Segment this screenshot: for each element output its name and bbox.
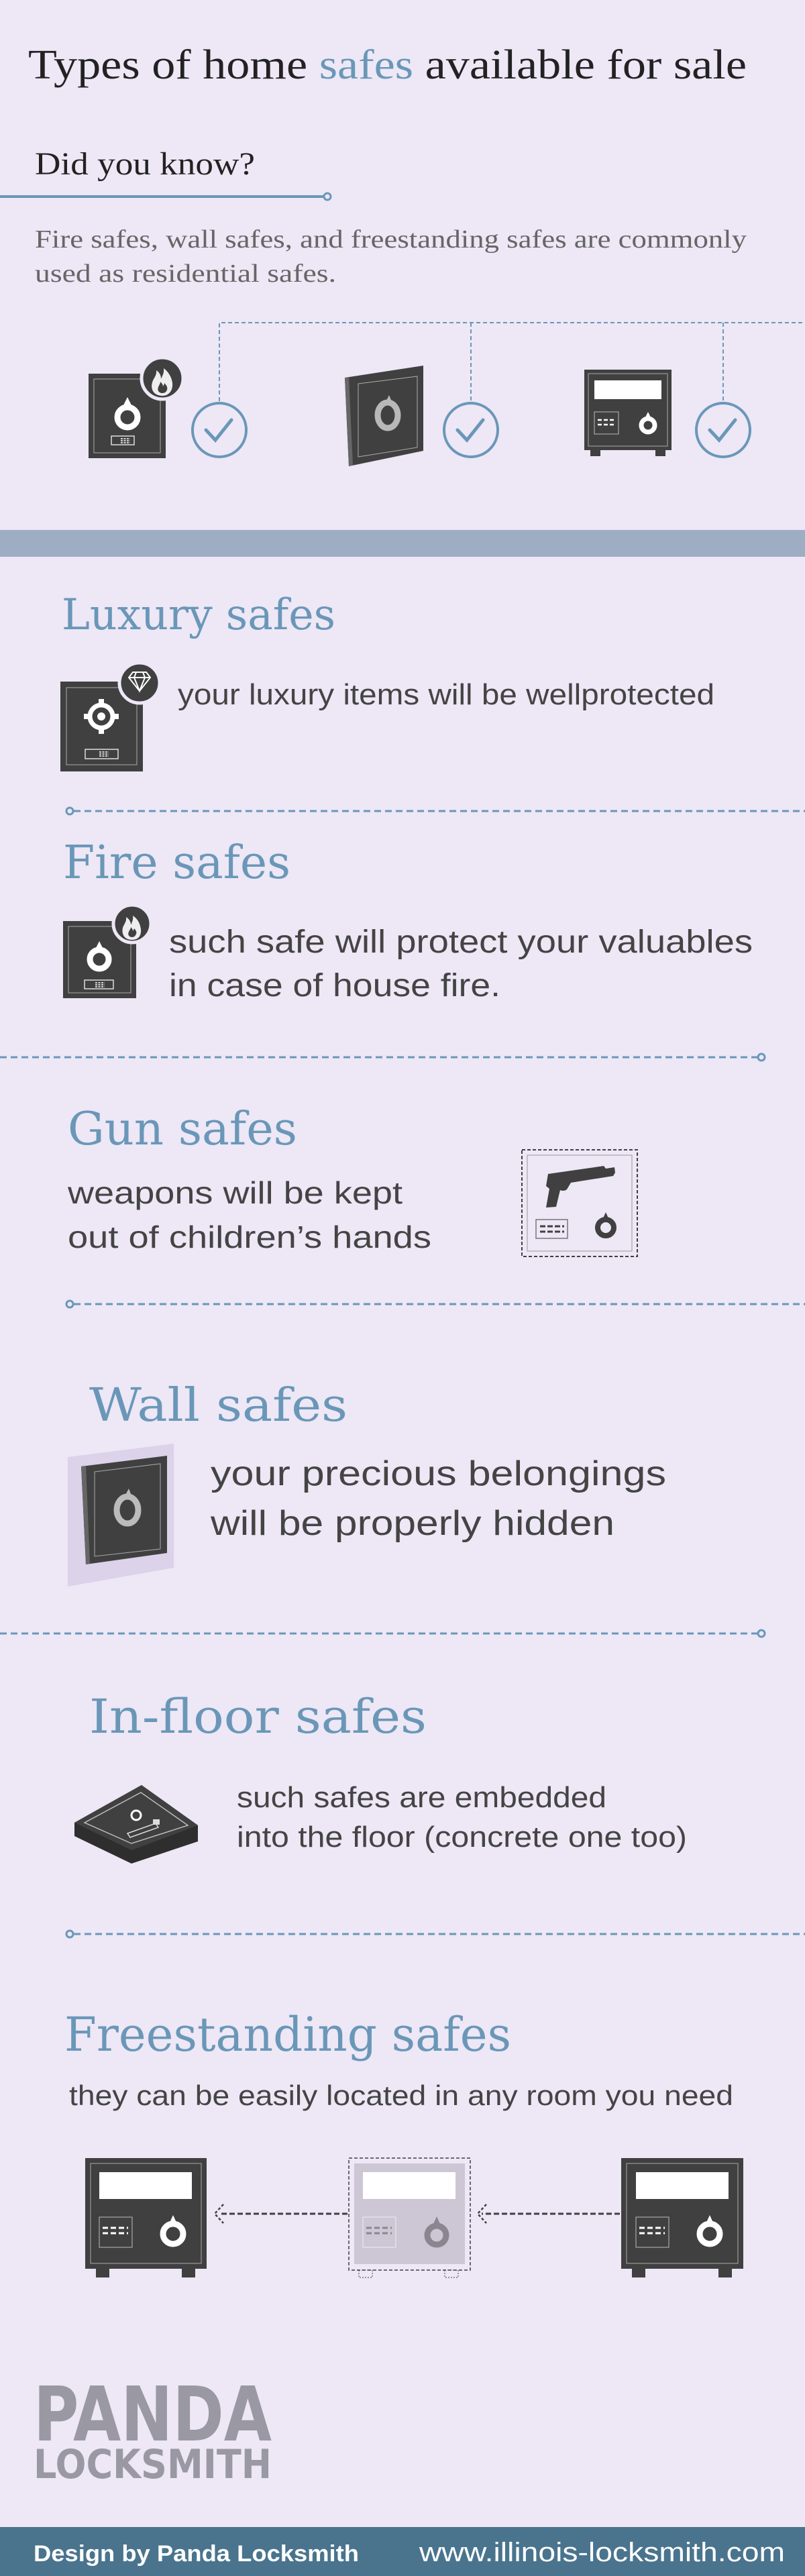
icon: wall safe [345, 366, 423, 466]
intro text: Fire safes, wall safes, and freestanding safes are commonly [35, 225, 747, 254]
icon: in-floor safe [74, 1785, 198, 1864]
section: luxury safes: your luxury items will be wellprotected [178, 678, 714, 711]
section: freestanding safes [64, 2007, 743, 2277]
dotted divider 5 [66, 1931, 805, 1937]
section: in-floor safes: into the floor (concrete one too) [237, 1821, 687, 1854]
icon: luxury safe [60, 663, 160, 771]
intro text: used as residential safes. [35, 260, 336, 288]
section: fire safes: Fire safes [63, 837, 290, 890]
divider band [0, 530, 805, 557]
section: wall safes: Wall safes [89, 1379, 347, 1432]
arrow right [478, 2204, 620, 2223]
section: in-floor safes: such safes are embedded [237, 1781, 606, 1814]
section: fire safes: such safe will protect your valuables [169, 924, 753, 960]
subheading: did you know: Did you know? [35, 146, 255, 182]
footer [0, 2527, 805, 2576]
connector lines [219, 323, 805, 401]
subheading: did you know [0, 146, 331, 200]
icon: freestanding safe right [621, 2158, 743, 2277]
section: fire safes: in case of house fire. [169, 968, 500, 1004]
section: in-floor safes [74, 1689, 687, 1864]
section: gun safes: Gun safes [68, 1103, 297, 1156]
logo: panda locksmith: LOCKSMITH [34, 2441, 272, 2488]
section: fire safes [63, 837, 753, 1004]
dotted divider 3 [66, 1301, 805, 1307]
icon: fire safe [63, 905, 151, 998]
icon: freestanding safe left [85, 2158, 207, 2277]
section: freestanding safes: Freestanding safes [64, 2007, 511, 2062]
icon: fire safe [89, 358, 183, 458]
section: gun safes [67, 1103, 637, 1256]
section: freestanding safes: they can be easily located in any room you need [69, 2080, 733, 2111]
section: wall safes [68, 1379, 666, 1587]
icon: freestanding safe [584, 370, 672, 456]
title: Types of home safes available for sale [28, 42, 747, 88]
section: luxury safes: Luxury safes [62, 590, 335, 640]
check circle 3 [696, 403, 750, 457]
section: luxury safes [60, 590, 714, 771]
arrow left [215, 2204, 347, 2223]
logo: panda locksmith: PANDA [34, 2371, 272, 2459]
intro text [35, 225, 747, 288]
check circle 1 [193, 403, 246, 457]
section: wall safes: your precious belongings [211, 1454, 666, 1493]
dotted divider 1 [66, 808, 805, 814]
dotted divider 4 [0, 1630, 765, 1637]
icon: freestanding safe ghost [349, 2158, 470, 2277]
section: in-floor safes: In-floor safes [89, 1689, 427, 1744]
section: gun safes: weapons will be kept [67, 1175, 402, 1210]
logo: panda locksmith [34, 2371, 272, 2488]
section: wall safes: will be properly hidden [210, 1504, 614, 1543]
footer: Design by Panda Locksmith [34, 2541, 359, 2567]
section: gun safes: out of children’s hands [68, 1220, 431, 1254]
dotted divider 2 [0, 1054, 765, 1061]
icon: gun safe [522, 1150, 637, 1256]
footer: www.illinois-locksmith.com [419, 2538, 785, 2567]
icon: wall safe [68, 1444, 174, 1587]
check circle 2 [444, 403, 498, 457]
